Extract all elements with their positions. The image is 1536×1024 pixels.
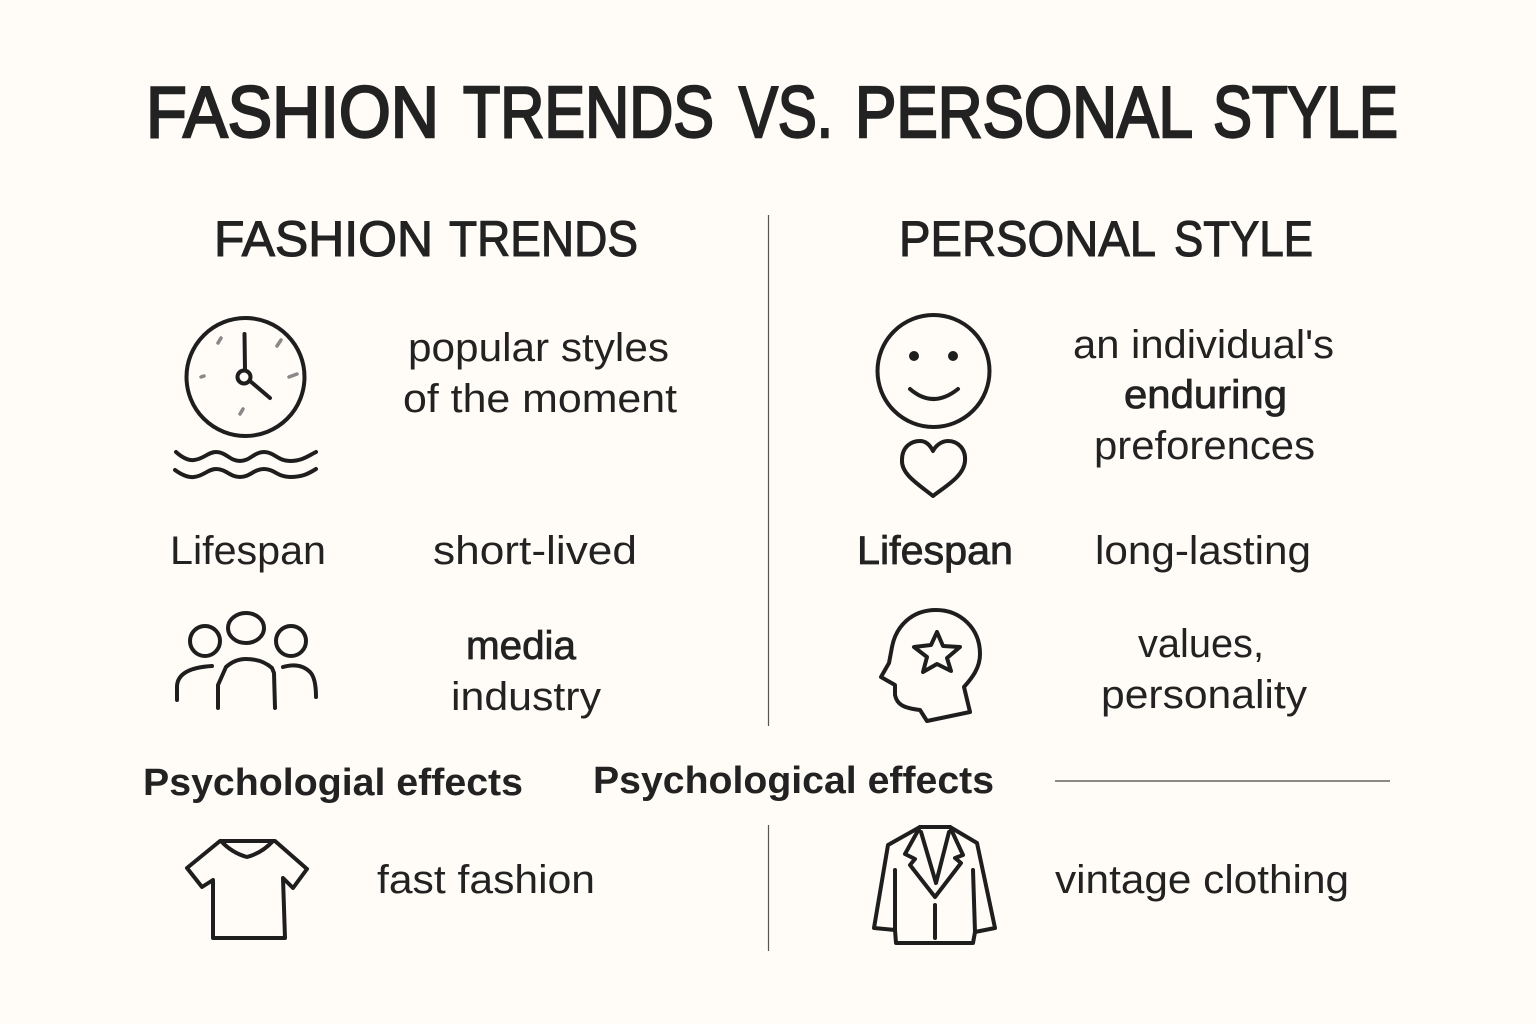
- text: media industry: media: [466, 624, 577, 668]
- text: definition of personal style: [1073, 323, 1334, 468]
- icon: t-shirt: [187, 841, 307, 938]
- panel: fashion trends: [143, 211, 677, 938]
- icon: smiley over heart: [878, 315, 990, 496]
- text: values, personality: values,: [1138, 622, 1264, 666]
- heading: personal style: PERSONAL: [899, 211, 1156, 267]
- text: media industry: industry: [451, 675, 601, 719]
- text: values, personality: personality: [1101, 673, 1307, 717]
- text: definition of personal style: an individual's: [1073, 323, 1334, 367]
- text: definition of trends: popular styles: [408, 326, 669, 370]
- label: lifespan: Lifespan: [170, 529, 326, 573]
- heading: fashion trends: TRENDS: [449, 211, 638, 267]
- label: lifespan: Lifespan: [857, 529, 1013, 573]
- label: psychological effects: Psychological effects: [593, 760, 994, 802]
- title: VS.: [739, 73, 833, 153]
- heading: fashion trends: FASHION: [214, 211, 433, 267]
- title: STYLE: [1213, 73, 1398, 153]
- text: definition of personal style: enduring: [1124, 373, 1287, 417]
- text: fast fashion: fast fashion: [377, 858, 595, 902]
- title: FASHION: [146, 73, 439, 153]
- text: definition of trends: [403, 326, 677, 421]
- heading: personal style: [899, 211, 1313, 267]
- icon: group of people: [177, 613, 316, 708]
- text: definition of personal style: preforences: [1094, 424, 1315, 468]
- title: PERSONAL: [855, 73, 1193, 153]
- heading: fashion trends: [214, 211, 638, 267]
- icon: clock over waves: [175, 318, 316, 477]
- value: short-lived: short-lived: [433, 529, 637, 573]
- panel: personal style: [593, 211, 1349, 943]
- text: media industry: [451, 624, 601, 719]
- text: vintage clothing: vintage clothing: [1055, 858, 1349, 902]
- text: values, personality: [1101, 622, 1307, 717]
- value: long-lasting: long-lasting: [1095, 529, 1311, 573]
- icon: head with star: [881, 610, 980, 721]
- title: [146, 73, 1398, 153]
- label: psychologial effects: Psychologial effects: [143, 762, 523, 804]
- text: definition of trends: of the moment: [403, 377, 677, 421]
- title: TRENDS: [463, 73, 714, 153]
- icon: blazer: [874, 827, 995, 943]
- heading: personal style: STYLE: [1174, 211, 1313, 267]
